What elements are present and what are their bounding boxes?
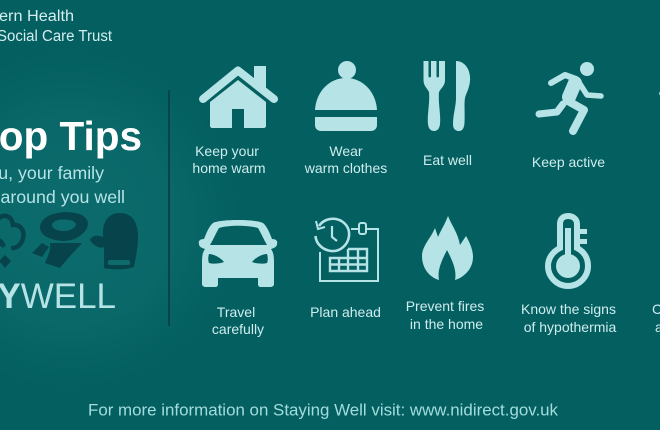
label	[304, 143, 387, 176]
label: in the home	[410, 316, 483, 332]
icon: car	[199, 220, 277, 287]
label: carefully	[212, 321, 264, 337]
icon: runner	[539, 62, 601, 131]
tip: prevent fires in the home	[406, 216, 484, 332]
organisation name: Social Care Trust	[0, 28, 113, 45]
icon: cloud	[0, 216, 24, 268]
label: Prevent fires	[406, 298, 484, 314]
icon: fork and knife	[424, 61, 470, 131]
label: Travel	[217, 304, 255, 320]
organisation name: ern Health	[0, 8, 74, 25]
label: of hypothermia	[524, 319, 617, 335]
icon: scarf	[32, 212, 88, 268]
label: Keep your	[195, 143, 259, 159]
subtitle: around you well	[0, 187, 125, 207]
icon: thermometer	[548, 216, 588, 286]
subtitle: u, your family	[0, 163, 104, 183]
icon: mitten	[90, 213, 138, 269]
tip: know the signs of hypothermia	[521, 216, 617, 335]
right-edge clipped icon fragment	[659, 92, 660, 95]
icon: clock and calendar	[316, 219, 378, 281]
label: Keep active	[532, 154, 605, 170]
title: Top Tips: op Tips	[0, 113, 142, 159]
label: warm clothes	[304, 160, 387, 176]
tip: wear warm clothes	[304, 61, 387, 176]
label: Eat well	[423, 152, 472, 168]
label	[192, 143, 266, 176]
campaign wordmark: STAYWELL: YWELL	[0, 277, 116, 316]
tip: keep active	[532, 62, 605, 170]
label: Plan ahead	[310, 304, 381, 320]
label: home warm	[192, 160, 266, 176]
tip: travel carefully	[199, 220, 277, 337]
icon: woolly hat	[315, 61, 377, 131]
label	[521, 301, 617, 335]
tip: eat well	[423, 61, 472, 168]
tip: keep your home warm	[192, 66, 274, 176]
label	[212, 304, 264, 337]
divider	[168, 90, 170, 326]
icon: house	[203, 66, 274, 128]
footer: more information: For more information on Staying Well visit: www.nidirect.gov.uk	[88, 402, 559, 420]
label: Wear	[329, 143, 363, 159]
label: Know the signs	[521, 301, 616, 317]
organisation name	[0, 8, 113, 45]
label	[406, 298, 484, 332]
icon: flame	[422, 216, 473, 280]
clipped tip label at right edge	[652, 301, 660, 335]
tip: plan ahead	[310, 219, 381, 320]
subtitle	[0, 163, 125, 207]
